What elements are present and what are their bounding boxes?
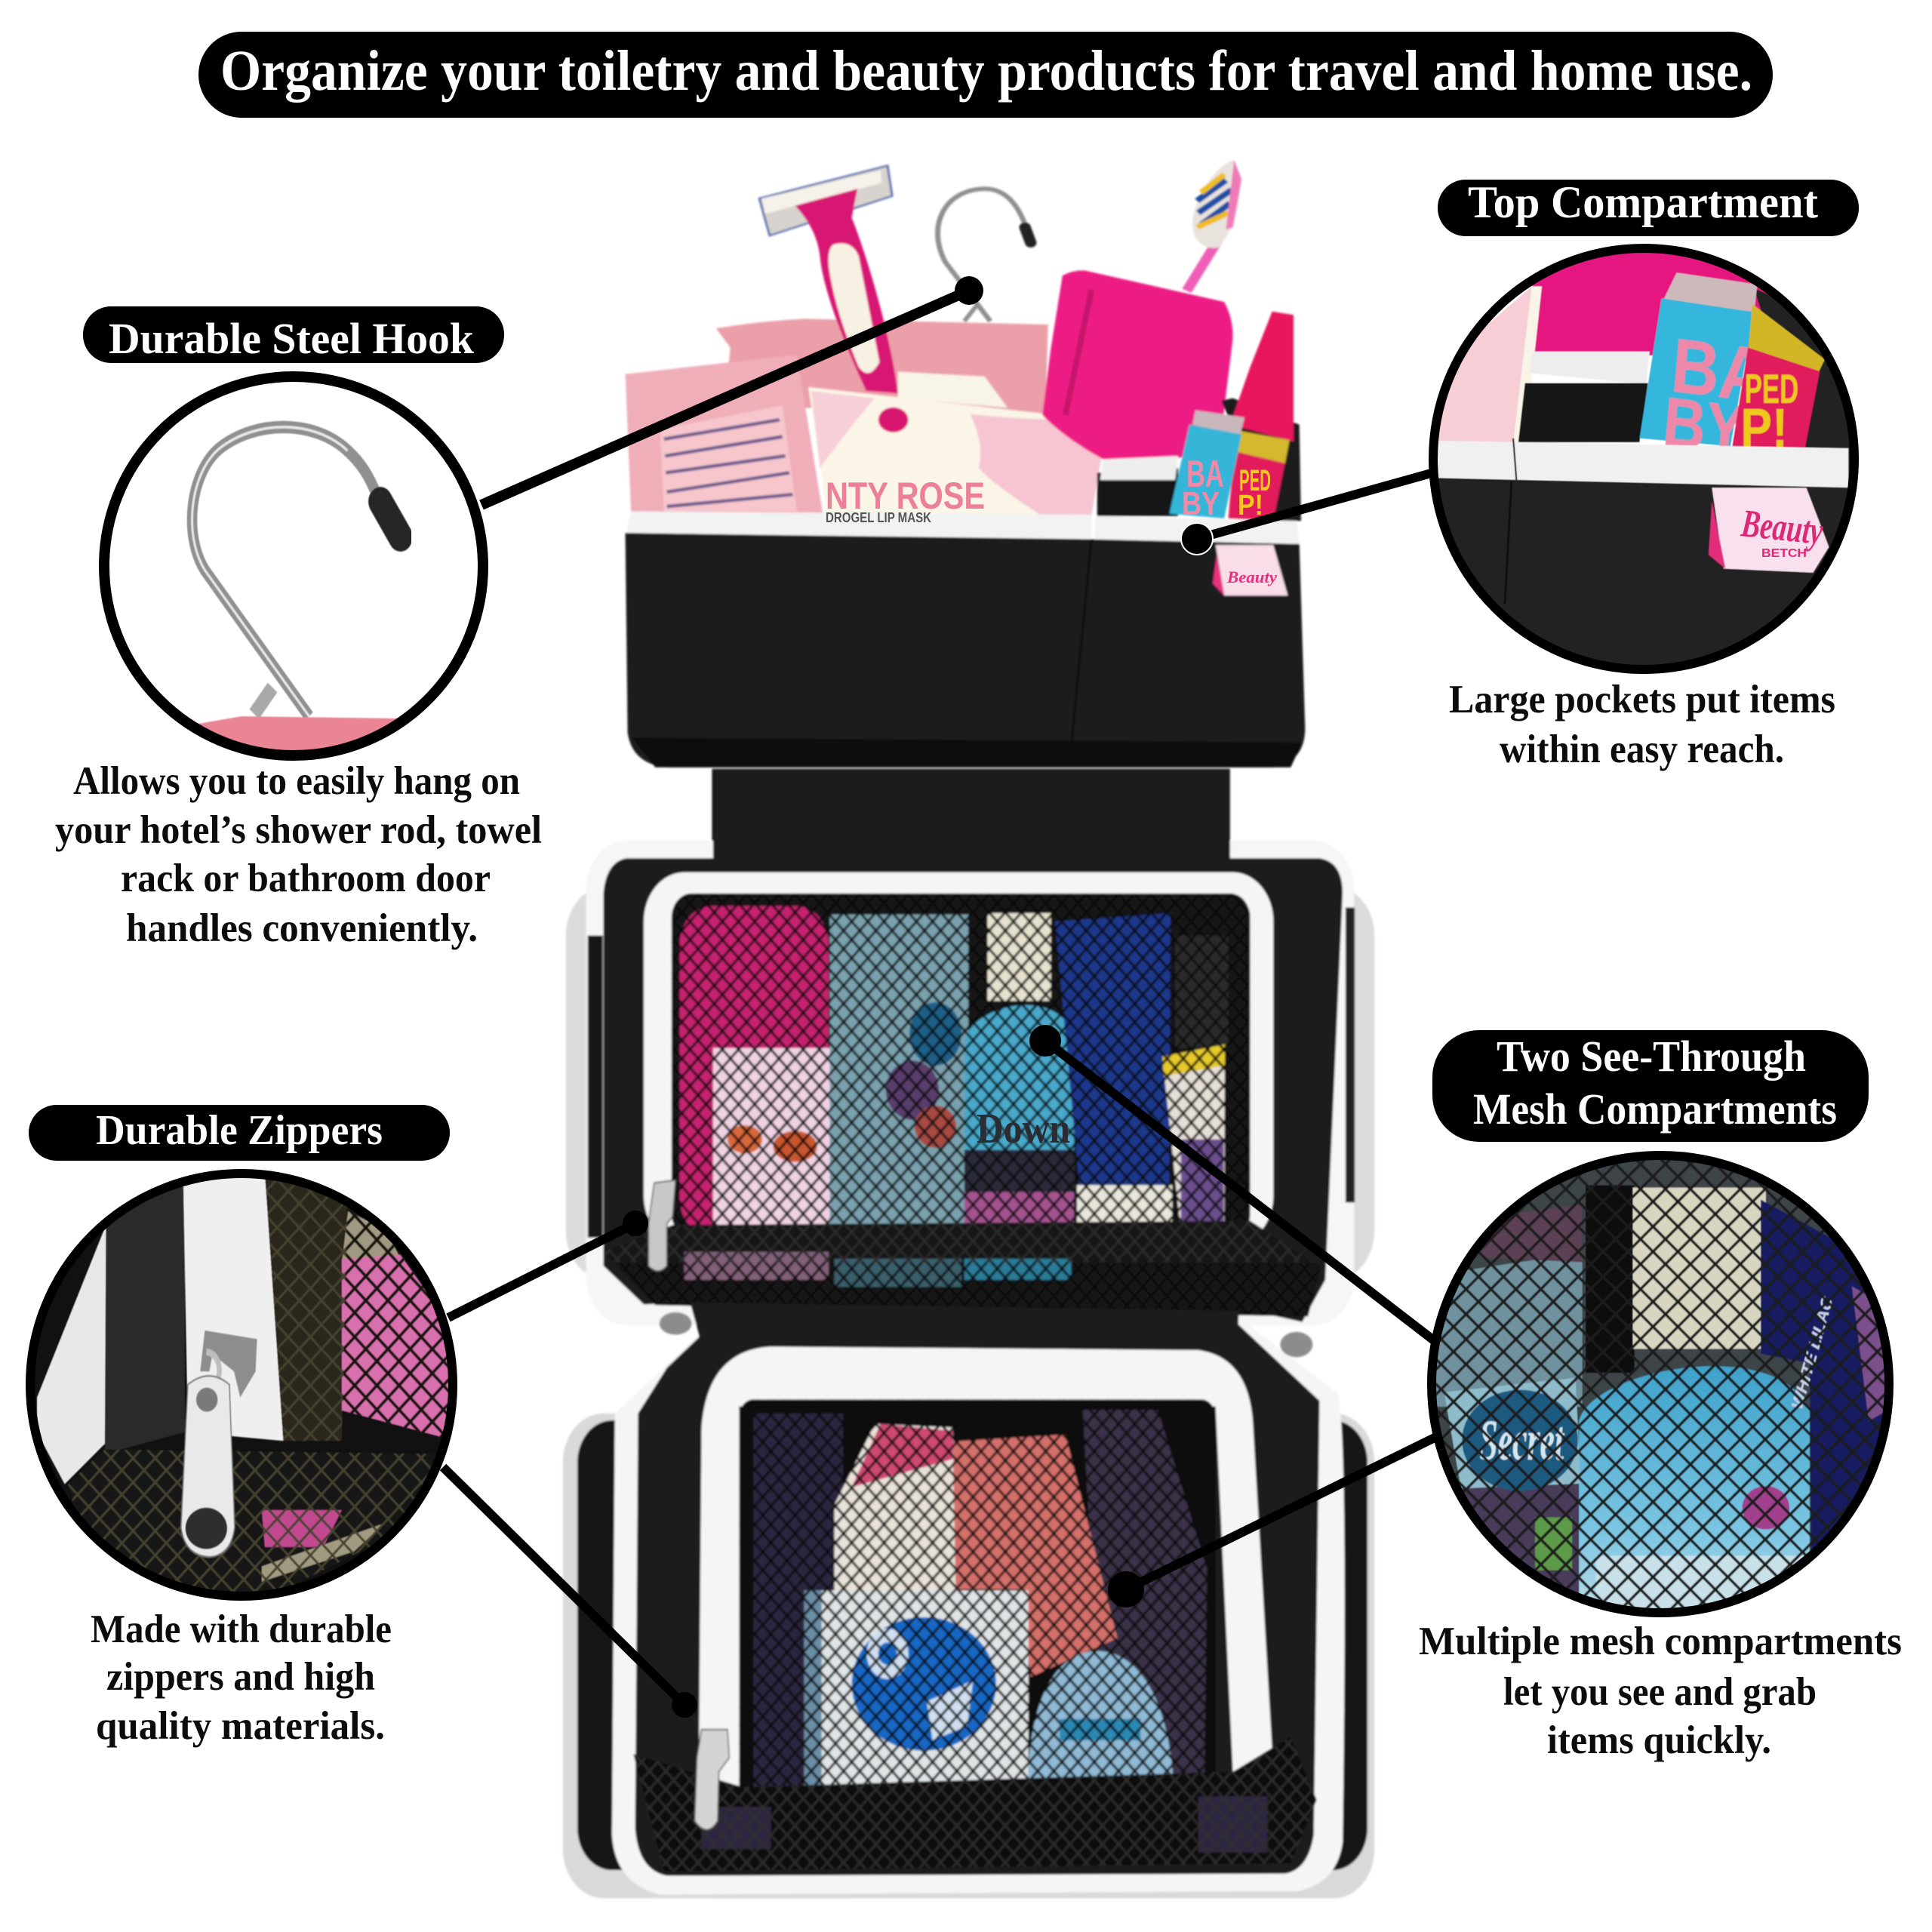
text block: top compartment description: Large pockets put items — [1449, 678, 1835, 721]
leader line: upper mesh — [1029, 1025, 1438, 1343]
salmon bottle — [952, 1435, 1118, 1677]
circle: mesh close-up — [1424, 1142, 1903, 1623]
text block: zippers description: zippers and high — [106, 1655, 375, 1699]
circle: mesh close-up: Secret — [1479, 1409, 1564, 1472]
lower mesh pocket — [598, 1217, 1325, 1322]
text block: hook description — [55, 759, 542, 950]
product illustration: open hanging toiletry bag — [563, 160, 1374, 1898]
heading: two see-through mesh compartments: Two See-Through — [1497, 1032, 1806, 1081]
dark tube and lip balm — [1162, 936, 1229, 1234]
razor — [759, 166, 898, 393]
hanging strap — [712, 769, 1230, 865]
white zipper frame — [644, 872, 1273, 1244]
blue and white box — [801, 1588, 1031, 1787]
white zipper frame — [699, 1346, 1272, 1793]
dark bottle right — [1083, 1410, 1207, 1828]
toothbrush — [1186, 160, 1241, 291]
text block: mesh description: let you see and grab — [1503, 1670, 1817, 1714]
brand label text — [1739, 502, 1826, 560]
title banner — [198, 32, 1773, 118]
heading: durable zippers: Durable Zippers — [96, 1107, 383, 1154]
bag shell — [563, 1303, 1374, 1898]
mascara — [1229, 312, 1294, 521]
leader line: top compartment — [1181, 472, 1434, 555]
embedded product text: Down — [977, 1106, 1070, 1152]
dark bottle left — [753, 1414, 843, 1828]
circle: pocket close-up: BA — [1669, 322, 1770, 420]
text block: hook description: rack or bathroom door — [121, 857, 491, 900]
lower mesh pocket — [633, 1737, 1317, 1872]
leader line: upper zipper — [448, 1211, 648, 1318]
lower mesh compartment — [563, 1303, 1374, 1898]
text block: hook description: Allows you to easily hang on — [73, 759, 520, 803]
pink and white bottle — [835, 1424, 958, 1592]
brand label text: Beauty — [1739, 502, 1826, 553]
embedded product text: DROGEL LIP MASK — [826, 510, 931, 525]
embedded product text: BA — [1186, 453, 1224, 495]
embedded product text: PED — [1239, 464, 1271, 497]
wrinkle release bottle — [964, 913, 1074, 1234]
text block: top compartment description: within easy reach. — [1500, 728, 1784, 771]
text block: zippers description: Made with durable — [91, 1607, 392, 1651]
embedded product text — [826, 453, 1277, 1152]
embedded product text: Beauty — [1226, 568, 1277, 586]
circle: mesh close-up: WHITE LILAC — [1789, 1293, 1836, 1414]
rose lip mask card — [808, 372, 1108, 516]
embedded product text: BY — [1182, 485, 1220, 522]
small lip mask sachet — [626, 355, 823, 514]
lip balm — [1169, 411, 1244, 518]
text block: top compartment description — [1449, 678, 1835, 771]
circle: pocket close-up — [1424, 241, 1872, 679]
circle: pocket close-up: BY — [1660, 383, 1749, 469]
mouthwash bottle — [1026, 1649, 1174, 1780]
heading: two see-through mesh compartments: Mesh Compartments — [1473, 1084, 1837, 1134]
panel: see-through mesh compartments — [1419, 1030, 1903, 1762]
panel: durable zippers — [29, 1105, 462, 1748]
circle: pocket close-up: P! — [1740, 398, 1788, 460]
brand label text: BETCH — [1761, 547, 1807, 560]
pink towel — [1042, 270, 1233, 461]
side pocket interior — [1097, 398, 1301, 521]
mesh window with products — [738, 1398, 1215, 1789]
embedded product text: NTY ROSE — [826, 475, 985, 517]
heading: durable steel hook: Durable Steel Hook — [109, 314, 475, 363]
mesh window with products — [672, 894, 1251, 1238]
zipper pull — [648, 1180, 675, 1271]
brand label — [1213, 545, 1287, 595]
heading: durable zippers — [29, 1105, 450, 1161]
title banner: Organize your toiletry and beauty products for travel and home use. — [220, 39, 1752, 103]
text block: zippers description — [91, 1607, 392, 1748]
text block: mesh description: items quickly. — [1547, 1718, 1771, 1762]
white pocket trim — [626, 511, 1300, 544]
circle: pocket close-up: PED — [1745, 365, 1798, 412]
leader line: lower mesh — [1108, 1436, 1438, 1607]
zipper pull — [694, 1730, 729, 1829]
panel: durable steel hook — [55, 306, 542, 950]
navy tube — [1055, 913, 1171, 1192]
heading: top compartment: Top Compartment — [1468, 177, 1818, 227]
embedded product text: P! — [1238, 490, 1263, 521]
bag shell — [566, 841, 1374, 1325]
deodorant bottle — [680, 906, 832, 1236]
leader line: hook — [481, 276, 983, 505]
text block: hook description: your hotel’s shower rod, towel — [55, 808, 542, 852]
wipes package — [716, 318, 1048, 415]
text block: mesh description — [1419, 1620, 1902, 1762]
text block: zippers description: quality materials. — [96, 1704, 385, 1748]
top compartment with products — [626, 160, 1305, 865]
circle: zipper close-up — [30, 1172, 462, 1605]
upper mesh compartment — [566, 841, 1374, 1325]
text block: mesh description: Multiple mesh compartments — [1419, 1620, 1902, 1663]
leader line: lower zipper — [443, 1467, 697, 1718]
scented spray bottle — [829, 915, 968, 1231]
circle: hook close-up — [103, 376, 484, 761]
icon: steel hook — [938, 189, 1031, 321]
black top pocket — [626, 533, 1305, 768]
heading: two see-through mesh compartments — [1432, 1030, 1869, 1142]
panel: top compartment — [1424, 177, 1872, 771]
text block: hook description: handles conveniently. — [126, 906, 478, 950]
